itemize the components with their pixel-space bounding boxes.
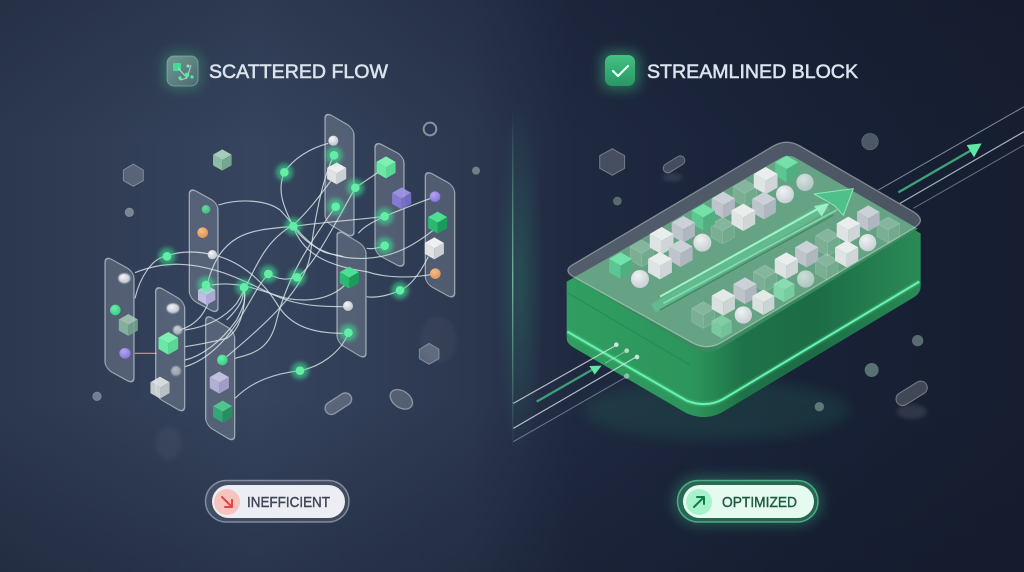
central arrow (653, 189, 853, 310)
block top surface (573, 156, 918, 352)
connection lines (135, 143, 438, 398)
heading: streamlined block (601, 51, 858, 90)
heading text: SCATTERED FLOW (209, 61, 389, 83)
floating particles left (93, 123, 480, 460)
glass panels (105, 112, 455, 442)
icon: check badge (601, 51, 640, 90)
spheres in block (631, 174, 876, 324)
heading: scattered flow (163, 52, 389, 90)
badge label: INEFFICIENT (247, 495, 330, 511)
cubes in block (609, 156, 900, 338)
icon: scattered nodes (163, 52, 202, 90)
badge: inefficient (206, 480, 349, 522)
icon: down arrow (214, 489, 240, 515)
glowing nodes (158, 147, 409, 379)
icon: up arrow (686, 489, 712, 515)
cubes (119, 149, 447, 423)
spheres (110, 136, 441, 376)
upper right flow lines (878, 107, 1024, 208)
heading text: STREAMLINED BLOCK (647, 61, 858, 83)
glass lid (568, 142, 920, 347)
scattered flow diagram (93, 112, 480, 460)
badge label: OPTIMIZED (722, 495, 797, 511)
streamlined block diagram (513, 107, 1024, 442)
glowing rim (567, 282, 919, 404)
lower left flow lines (513, 342, 639, 442)
block body (567, 157, 921, 417)
floating particles right (600, 133, 930, 419)
block glow (583, 380, 850, 440)
center divider (496, 105, 544, 455)
badge: optimized (673, 476, 823, 526)
